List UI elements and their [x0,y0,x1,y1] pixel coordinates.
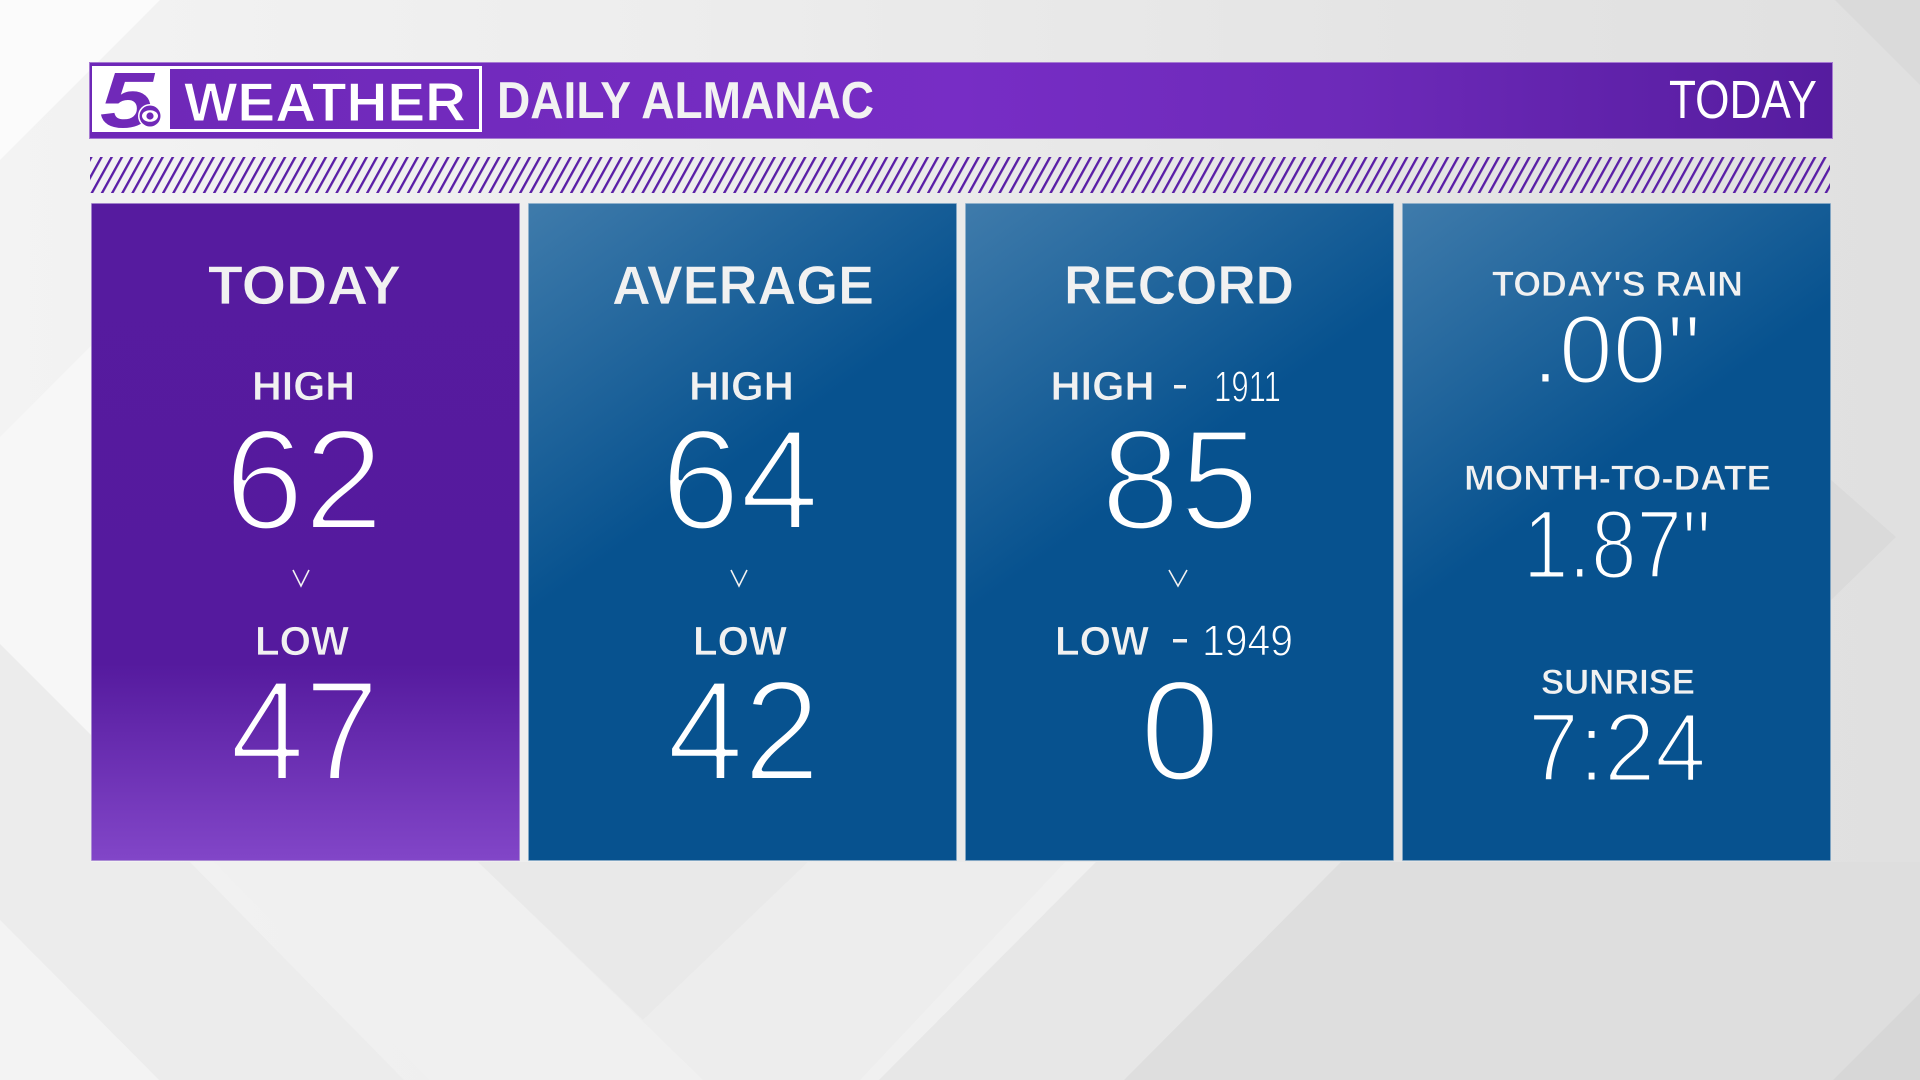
rain value: .00" [1532,295,1701,404]
hatch strip [90,157,1830,193]
low label: LOW [693,618,787,664]
low label: LOW [1055,618,1149,664]
sunrise label: SUNRISE [1541,663,1695,702]
low value: 0 [1140,652,1220,811]
low dash [1173,639,1187,642]
high record year: 1911 [1214,362,1281,412]
separator chevron [1169,570,1187,586]
high value: 62 [224,401,384,560]
high label: HIGH [252,363,355,409]
rain label: TODAY'S RAIN [1492,265,1743,304]
panel: average [528,204,956,860]
high value: 85 [1101,401,1259,560]
heading: RECORD [1064,254,1294,316]
separator chevron [731,570,747,586]
panel: rain and sunrise [1402,204,1830,860]
low record year: 1949 [1202,616,1293,666]
heading: AVERAGE [612,254,874,316]
high value: 64 [661,401,819,560]
logo word: WEATHER [184,71,466,133]
high dash [1174,385,1186,388]
header title: DAILY ALMANAC [497,72,874,130]
header date label: TODAY [1669,70,1817,130]
sunrise value: 7:24 [1528,693,1706,802]
low value: 42 [667,652,820,811]
panel: record [966,204,1394,860]
high label: HIGH [689,363,794,409]
separator chevron [293,570,309,586]
header bar [90,55,1832,144]
eye emblem [138,104,162,128]
panel: today [92,204,520,860]
logo numeral 5: 5 [100,55,155,144]
high label: HIGH [1050,363,1154,409]
low label: LOW [255,618,349,664]
low value: 47 [230,652,379,811]
heading: TODAY [208,254,401,316]
station logo [92,55,482,144]
month value: 1.87" [1523,490,1711,599]
month label: MONTH-TO-DATE [1464,459,1771,498]
